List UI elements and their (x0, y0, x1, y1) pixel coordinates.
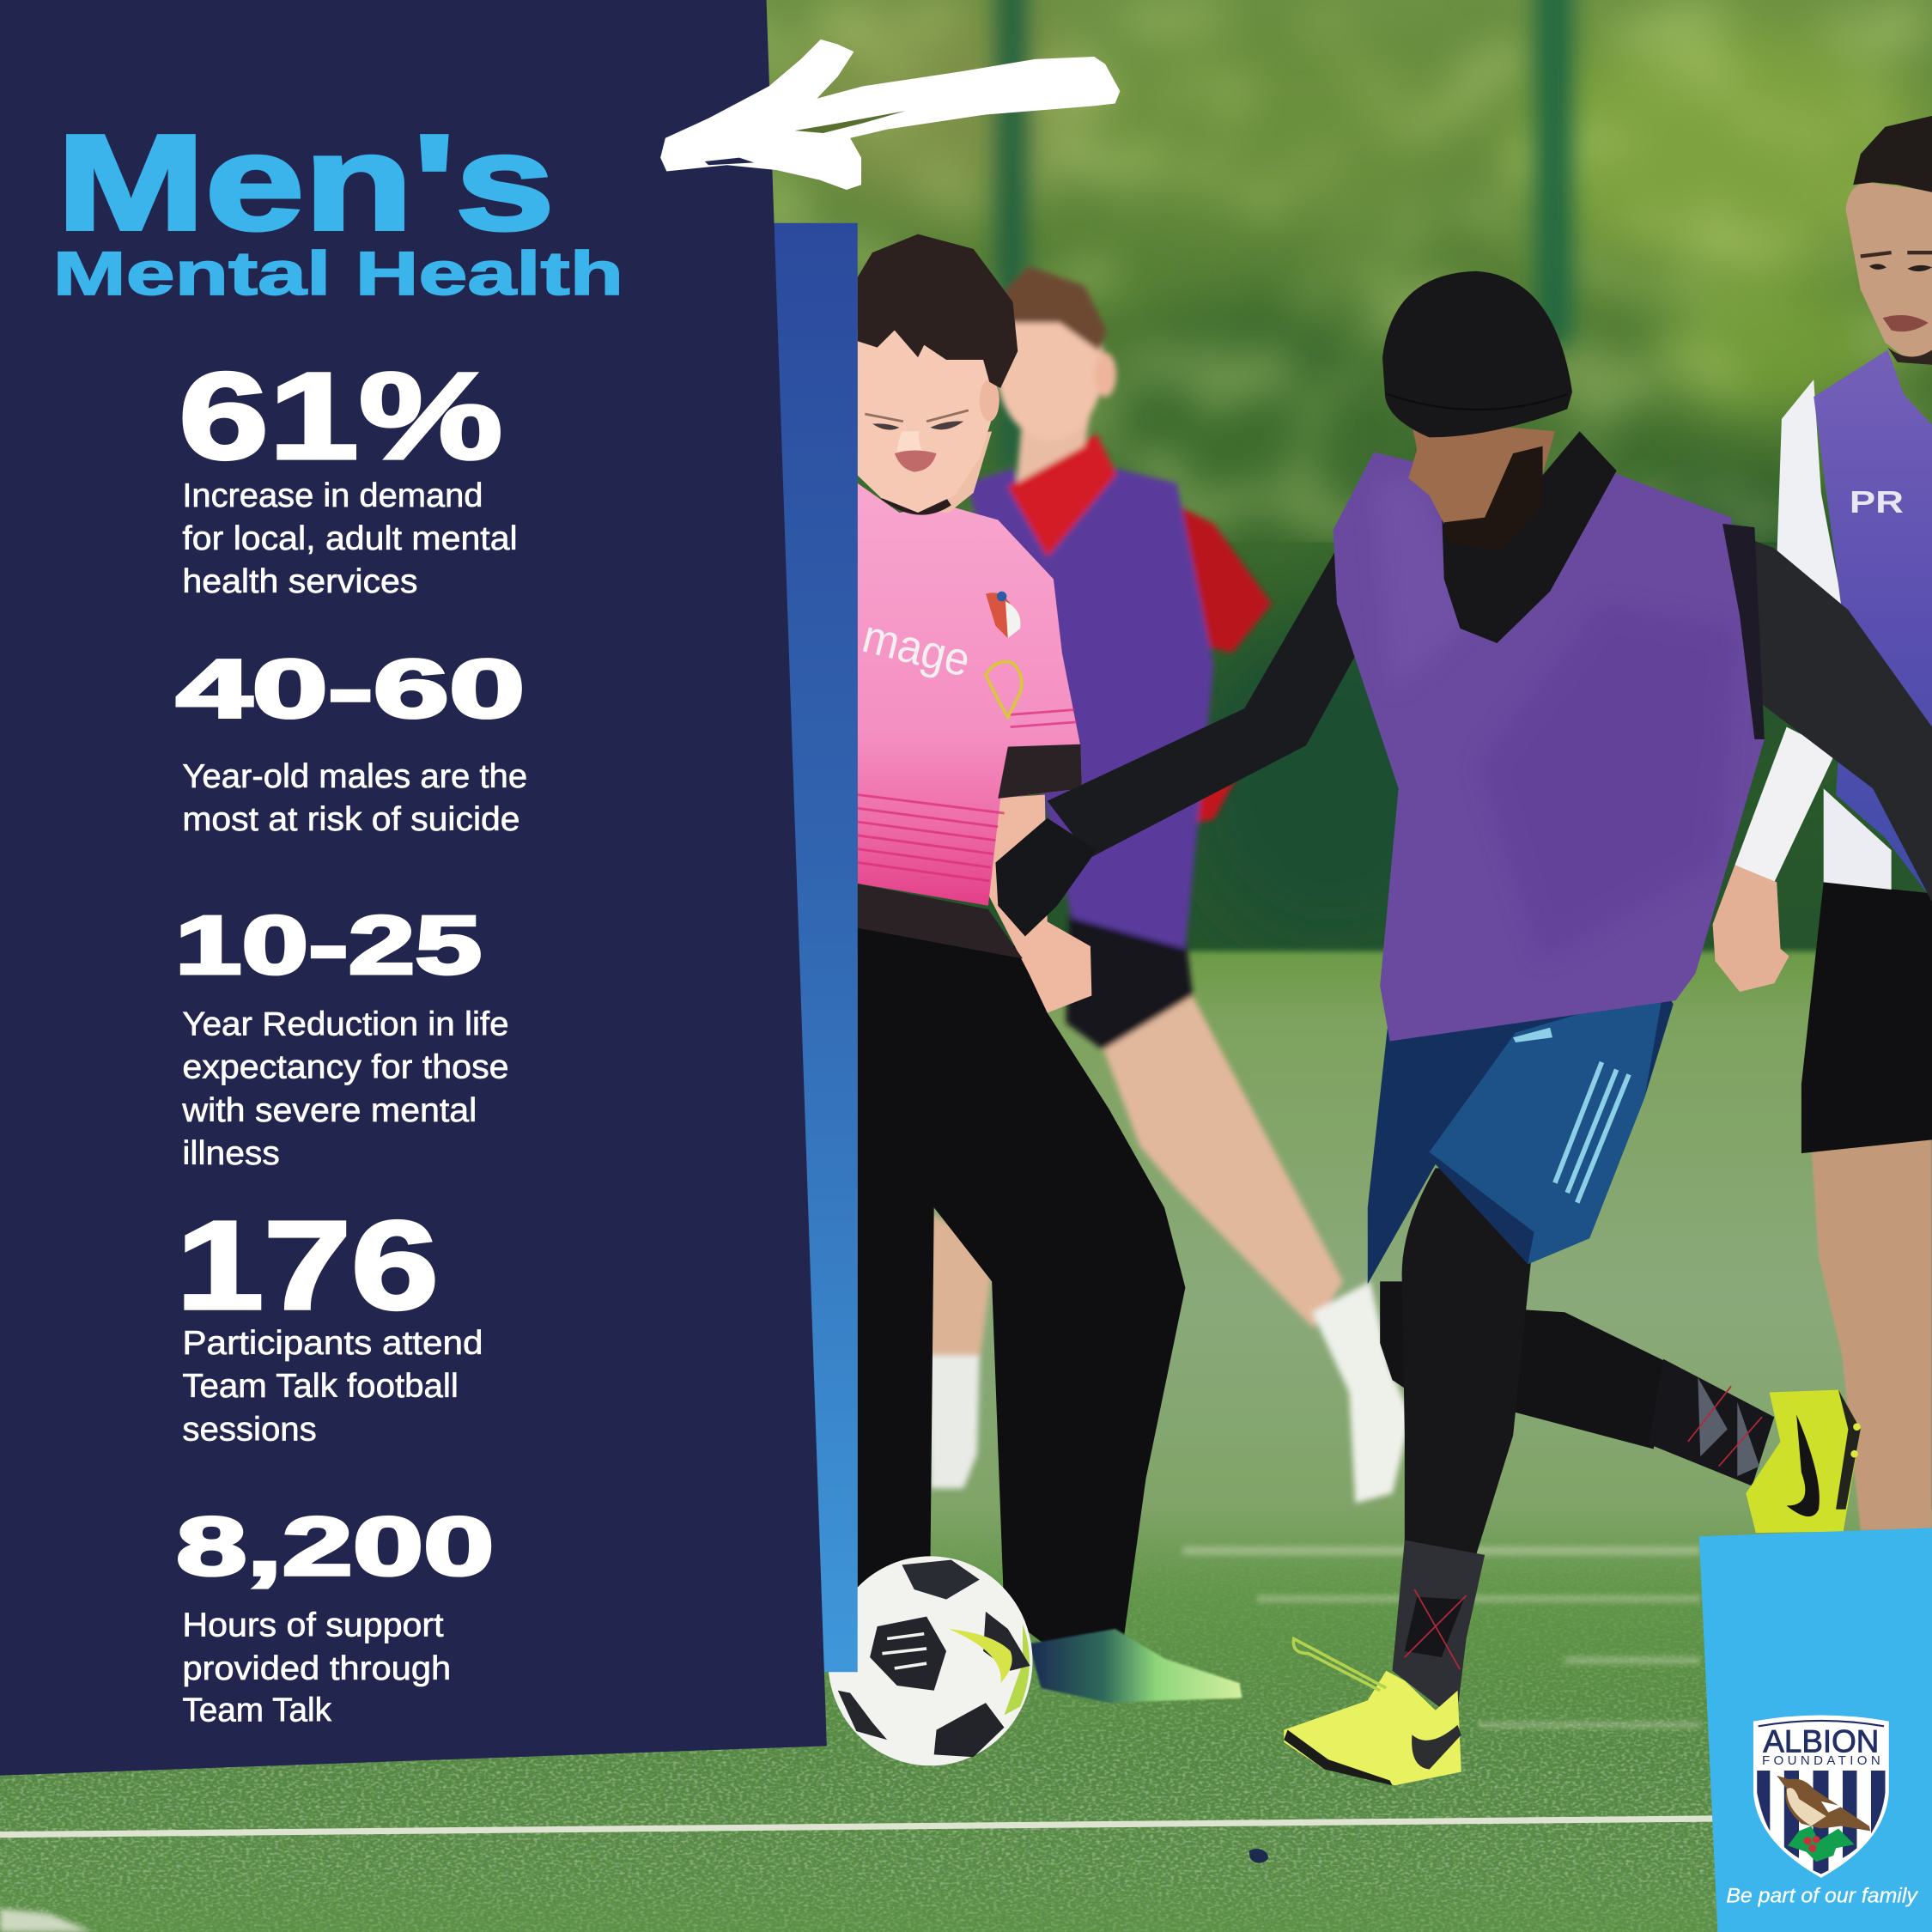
stat: 40-60: 40-60 (176, 643, 525, 735)
throstle bird (1777, 1776, 1870, 1831)
stat: 8,200: Hours of support (182, 1607, 444, 1644)
neck and collar (1442, 431, 1617, 643)
glove (995, 818, 1097, 937)
stat: 61%: 61% (179, 348, 502, 485)
shirt sponsor text: mage (858, 610, 975, 687)
face (1408, 419, 1555, 549)
stat: 8,200: 8,200 (176, 1501, 494, 1593)
neck (858, 431, 992, 513)
stat: 8,200: Team Talk (182, 1692, 332, 1729)
title: Men's (57, 107, 555, 258)
stat: 176 (176, 1196, 483, 1448)
stat: 10-25: illness (182, 1135, 280, 1172)
blue vertical strip (774, 223, 858, 1672)
sleeve band (998, 744, 1082, 799)
stat: 61% (179, 348, 518, 600)
right leg (1811, 1133, 1932, 1530)
beanie (1382, 271, 1572, 437)
player in pink shirt (850, 234, 1242, 1703)
bib (1334, 453, 1765, 1042)
shorts (1801, 882, 1932, 1153)
stat: 61%: Increase in demand (182, 477, 483, 514)
beard (1444, 446, 1543, 552)
white pitch line (0, 1819, 1713, 1835)
stat: 61%: health services (182, 563, 417, 600)
kicking boot (1746, 1390, 1861, 1533)
standing leg tights (1402, 1168, 1534, 1555)
shirt badge (986, 592, 1022, 717)
face (1846, 182, 1932, 360)
hand (1713, 865, 1789, 992)
waist band (850, 882, 1023, 958)
stat: 61%: for local, adult mental (182, 520, 518, 557)
crest wordmark: FOUNDATION (1762, 1753, 1880, 1768)
standing sock (1392, 1540, 1485, 1720)
stat: 10-25: Year Reduction in life (182, 1005, 509, 1042)
midground pitch (739, 951, 1932, 1530)
shorts (1368, 986, 1674, 1284)
football (828, 1556, 1032, 1765)
right arm (1719, 527, 1932, 902)
standing boot (1284, 1638, 1461, 1785)
player on the right (1713, 116, 1932, 1530)
left arm (1048, 474, 1377, 858)
kicking leg (1506, 1309, 1666, 1449)
rear leg (1380, 1281, 1417, 1394)
title: Mental Health (53, 240, 623, 308)
hair (1853, 116, 1932, 192)
forearm and hand (986, 795, 1091, 1013)
hair (850, 234, 1018, 388)
fence poles (997, 0, 1572, 468)
white base layer (1777, 380, 1844, 739)
crest wordmark: ALBION (1763, 1722, 1879, 1759)
stat: 8,200: provided through (182, 1650, 451, 1687)
shirt hoop stripes (858, 710, 1077, 881)
kicking sock (1649, 1359, 1774, 1486)
track pants (850, 927, 1185, 1646)
shirt (850, 478, 1082, 906)
player in background: blurred, red top and purple bib (927, 266, 1411, 1504)
main player (995, 271, 1932, 1785)
Albion Foundation crest (1753, 1715, 1889, 1878)
holly leaves and berries (1788, 1826, 1855, 1862)
tagline: Be part of our family (1726, 1885, 1919, 1908)
bib text: PR (1850, 485, 1904, 519)
stat: 40-60 (176, 643, 527, 838)
stat: 40-60: Year-old males are the (182, 758, 527, 795)
stat: 176: 176 (176, 1196, 439, 1336)
title (53, 107, 623, 308)
pale pitch markings (1183, 1546, 1700, 1728)
foreground pitch (0, 1510, 1932, 1932)
stat: 10-25: 10-25 (175, 900, 482, 992)
stat: 176: sessions (182, 1411, 317, 1448)
light blue logo panel (1699, 1528, 1932, 1932)
face (850, 326, 995, 513)
stat: 10-25: expectancy for those (182, 1049, 509, 1086)
stat: 176: Team Talk football (182, 1368, 459, 1405)
navy stats panel (0, 0, 827, 1776)
stat: 8,200 (176, 1501, 494, 1729)
arrow: white brush stroke pointing at title (660, 39, 1120, 190)
stat: 40-60: most at risk of suicide (182, 801, 520, 838)
shoe (1029, 1629, 1242, 1703)
stat: 10-25 (175, 900, 509, 1172)
bib (1814, 350, 1932, 900)
stat: 10-25: with severe mental (181, 1092, 477, 1129)
stat: 176: Participants attend (182, 1325, 483, 1362)
